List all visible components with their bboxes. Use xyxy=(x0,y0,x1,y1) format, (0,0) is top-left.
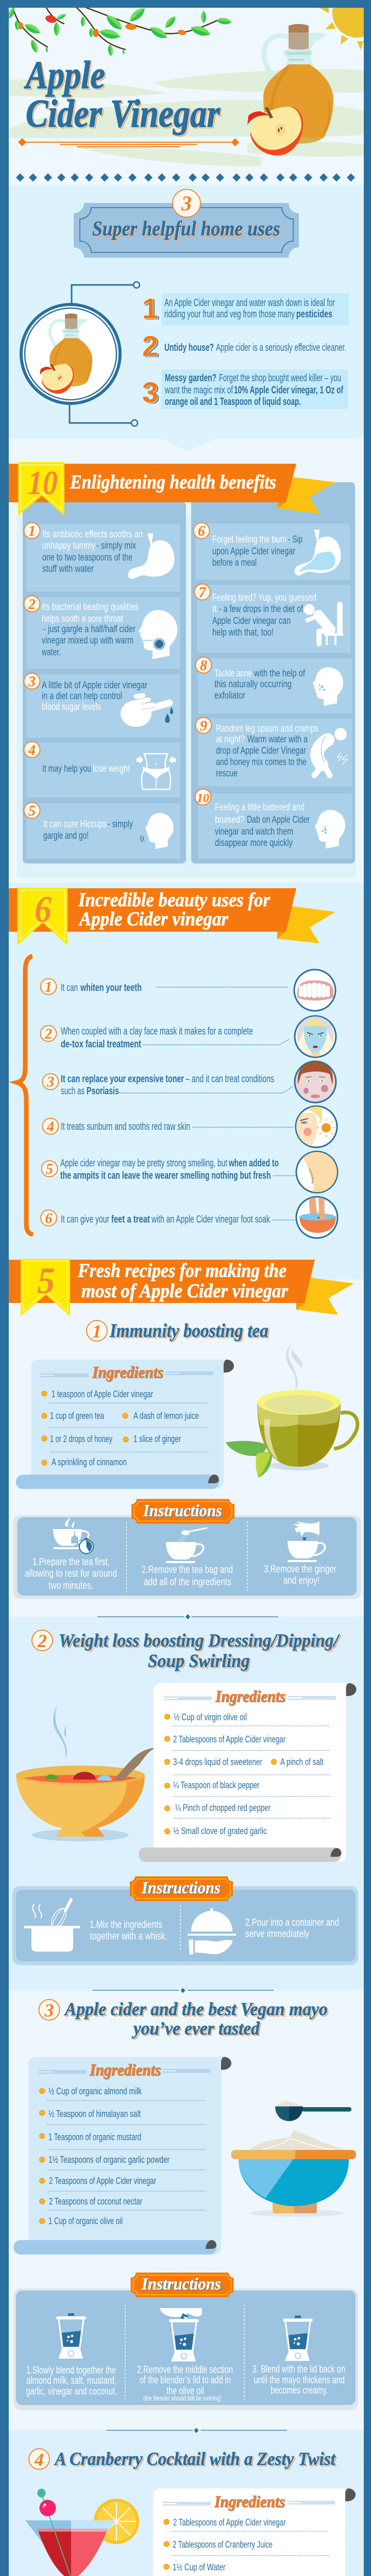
recipe 2 ingredients scroll: ½ Small clove of grated garlic xyxy=(173,1825,267,1836)
benefit 2: helps sooth a sore throat xyxy=(42,614,124,624)
icon: foot soak xyxy=(296,1197,338,1238)
recipe 1 instructions: 2.Remove the tea bag and xyxy=(142,1564,233,1575)
beauty use 6: It can give your xyxy=(61,1213,109,1225)
benefit 1 xyxy=(24,522,180,591)
benefit 9: and honey mix comes to the xyxy=(216,757,307,768)
recipe 3 ingredients scroll: 1 Teaspoon of organic mustard xyxy=(48,2131,141,2142)
benefit 8: 8 xyxy=(200,658,207,674)
benefit 2: 2 xyxy=(28,597,36,613)
icon: mayo bowl xyxy=(231,2130,356,2217)
benefit 4: 4 xyxy=(28,742,36,758)
instructions badge: Instructions xyxy=(143,1502,222,1520)
panel: home use 1: ridding your fruit and veg from those many xyxy=(164,309,295,320)
recipe 1 ingredients scroll: 1 or 2 drops of honey xyxy=(50,1433,113,1444)
icon: spoon xyxy=(275,2100,351,2121)
recipe 1 ingredients scroll: A sprinkling of cinnamon xyxy=(52,1456,127,1467)
benefit 2 xyxy=(24,596,180,669)
panel: health benefits left column xyxy=(23,502,186,863)
recipe 3 instructions: becomes creamy. xyxy=(271,2385,328,2396)
benefit 7 xyxy=(194,584,350,653)
number badge 3: 3 xyxy=(181,192,192,215)
recipe 2 instructions: together with a whisk. xyxy=(90,1931,167,1942)
benefit 5 xyxy=(24,803,180,859)
benefit 6: 6 xyxy=(198,523,205,539)
instructions badge: Instructions xyxy=(141,1879,221,1897)
benefit 10: 10 xyxy=(197,792,209,805)
benefit 4 xyxy=(24,742,180,798)
recipe 3 ingredients scroll: ½ Cup of organic almond milk xyxy=(48,2086,142,2096)
benefit 7: - a few drops in the diet of xyxy=(219,604,303,615)
recipe 1 instructions: 1.Prepare the tea first, xyxy=(32,1556,110,1568)
icon: psoriasis face xyxy=(295,1061,336,1103)
brace xyxy=(17,956,33,1234)
ribbon: recipes xyxy=(9,1259,354,1316)
beauty use 3: – and it can treat conditions xyxy=(185,1073,274,1085)
recipe 2 heading xyxy=(32,1630,340,1671)
recipe 3 instructions: the olive oil xyxy=(166,2385,204,2397)
benefit 10: Feeling a little battered and xyxy=(215,802,305,813)
icon: teeth xyxy=(294,970,335,1011)
ribbon: recipes: Fresh recipes for making the xyxy=(77,1260,286,1282)
beauty use 4: 4 xyxy=(46,1119,54,1135)
benefit 3: 3 xyxy=(28,674,36,690)
benefit 4: It may help you xyxy=(42,764,91,774)
panel: home use 3 xyxy=(142,369,348,409)
benefit 3: A little bit of Apple cider vinegar xyxy=(42,680,148,691)
recipe 3 instructions: (the blender should still be running). xyxy=(143,2395,223,2402)
benefit 8 xyxy=(196,657,352,714)
ribbon: recipes: most of Apple Cider vinegar xyxy=(81,1280,289,1302)
heading text: Super helpful home uses xyxy=(92,217,280,240)
recipe 1 instructions: add all of the ingredients xyxy=(144,1577,231,1588)
title underline xyxy=(18,138,239,147)
recipe 3 instructions xyxy=(13,2273,358,2410)
panel: health benefits right column xyxy=(191,482,355,863)
benefit 7: 7 xyxy=(199,585,206,601)
recipe 2 ingredients scroll: ½ Cup of virgin olive oil xyxy=(174,1711,247,1722)
recipe 1 instructions: allowing to rest for around xyxy=(25,1568,117,1580)
benefit 2: - just gargle a half/half cider xyxy=(43,624,136,635)
recipe 4 ingredients scroll: 1½ Cup of Water xyxy=(173,2562,226,2572)
apple tree branches xyxy=(7,5,232,56)
beauty use 5: when added to xyxy=(228,1157,279,1169)
benefit 8: with the help of xyxy=(254,668,306,679)
recipe 3 heading: you’ve ever tasted xyxy=(131,2018,260,2039)
benefit 9: rescue xyxy=(216,768,238,779)
recipe 1 ingredients scroll: 1 teaspoon of Apple Cider vinegar xyxy=(52,1388,153,1399)
recipe 3 ingredients scroll: 1½ Teaspoons of organic garlic powder xyxy=(48,2154,170,2165)
benefit 6: before a meal xyxy=(212,557,257,568)
beauty use 5: the armpits it can leave the wearer smelling nothing but fresh xyxy=(60,1170,271,1181)
recipe 1 ingredients scroll: A dash of lemon juice xyxy=(133,1410,199,1421)
ribbon: health benefits xyxy=(9,462,335,516)
benefit 7: it xyxy=(212,604,217,615)
benefit 2: Its bacterial beating qualities xyxy=(42,602,139,613)
title: Apple xyxy=(24,54,105,97)
benefit 1: stuff with water xyxy=(42,564,94,574)
panel: home use 3: Messy garden? xyxy=(165,372,216,384)
benefit 5: gargle and go! xyxy=(43,831,89,841)
icon: blender 2 with hand xyxy=(160,2308,202,2362)
recipe 2 ingredients scroll: ¼ Pinch of chopped red pepper xyxy=(175,1802,271,1813)
recipe 3 heading: Apple cider and the best Vegan mayo xyxy=(64,1999,328,2020)
beauty use 3: such as xyxy=(61,1085,85,1097)
panel: home use 3: 3 xyxy=(142,376,158,409)
recipe 3 instructions: almond milk, salt, mustard, xyxy=(26,2375,116,2386)
ribbon: health benefits: 10 xyxy=(28,464,58,502)
ribbon: beauty uses: Incredible beauty uses for xyxy=(78,889,271,911)
benefit 5: It can cure Hiccups xyxy=(43,819,107,829)
panel: home use 1: pesticides xyxy=(296,309,332,320)
benefit 3: blood sugar levels xyxy=(42,702,101,713)
instructions badge xyxy=(131,2273,234,2297)
recipe 3 ingredients scroll: 1 Cup of organic olive oil xyxy=(48,2215,123,2226)
icon: soup bowl xyxy=(16,1704,158,1841)
beauty use 1: 1 xyxy=(45,979,52,995)
divider xyxy=(106,2428,287,2433)
beauty use 6: feet a treat xyxy=(111,1213,150,1225)
benefit 6 xyxy=(194,522,350,580)
recipe 2 heading: 2 xyxy=(37,1631,47,1651)
beauty use 5: 5 xyxy=(46,1161,53,1177)
benefit 9: at night? xyxy=(216,734,245,745)
recipe 3 ingredients scroll: Ingredients xyxy=(89,2060,161,2079)
panel: home uses heading xyxy=(74,190,299,258)
beauty use 5: Apple cider vinegar may be pretty strong smelling, but xyxy=(60,1157,227,1169)
ribbon: beauty uses: 6 xyxy=(35,889,52,930)
bottle and apple xyxy=(247,24,334,156)
ribbon: health benefits: Enlightening health benefits xyxy=(70,471,276,493)
instructions badge xyxy=(130,1876,233,1901)
icon: spoon and cup xyxy=(166,1528,207,1563)
panel: home use 2: 2 xyxy=(142,330,158,362)
panel: home use 2: Untidy house? xyxy=(164,342,214,353)
recipe 3 heading xyxy=(39,1999,328,2039)
icon: blender 1 xyxy=(56,2313,86,2359)
benefit 9 xyxy=(196,717,352,786)
panel: home use 1 xyxy=(142,292,349,326)
benefit 7: help with that, too! xyxy=(212,628,274,638)
beauty use 4 xyxy=(42,1118,294,1135)
icon: cup and stopwatch xyxy=(53,1517,93,1554)
recipe 4 ingredients scroll: Ingredients xyxy=(214,2492,285,2511)
ribbon: beauty uses: Apple Cider vinegar xyxy=(78,908,229,930)
benefit 9: Warm water with a xyxy=(247,734,308,745)
benefit 9: drop of Apple Cider Vinegar xyxy=(216,745,306,756)
recipe 1 heading: Immunity boosting tea xyxy=(109,1320,268,1342)
lemon slice xyxy=(94,2499,139,2544)
recipe 2 ingredients scroll: 2 Tablespoons of Apple Cider vinegar xyxy=(173,1734,285,1744)
benefit 8: this naturally occurring xyxy=(214,679,292,690)
recipe 3 ingredients scroll: 2 Teaspoons of Apple Cider vinegar xyxy=(49,2175,156,2186)
benefit 5: 5 xyxy=(28,803,36,819)
beauty use 6: with an Apple Cider vinegar foot soak xyxy=(151,1213,271,1225)
recipe 3 ingredients scroll xyxy=(14,2057,231,2255)
beauty use 2: When coupled with a clay face mask it makes for a complete xyxy=(61,1025,253,1037)
benefit 4: lose weight xyxy=(93,764,130,774)
recipe 3 instructions: 2.Remove the middle section xyxy=(137,2364,233,2376)
icon: cloche and hand xyxy=(188,1908,236,1955)
benefit 1: Its antibiotic effects sooths an xyxy=(42,529,143,540)
benefit 3: in a diet can help control xyxy=(42,691,122,702)
recipe 1 ingredients scroll: Ingredients xyxy=(92,1363,163,1381)
panel: home use 3: orange oil and 1 Teaspoon of liquid soap. xyxy=(165,396,301,408)
beauty use 3: It can replace your expensive toner xyxy=(61,1073,184,1085)
benefit 10: vinegar and watch them xyxy=(215,826,293,837)
recipe 2 ingredients scroll: A pinch of salt xyxy=(280,1756,324,1767)
recipe 2 ingredients scroll: ¼ Teaspoon of black pepper xyxy=(173,1780,260,1790)
recipe 2 ingredients scroll: Ingredients xyxy=(215,1687,285,1705)
benefit 8: exfoliator xyxy=(214,690,246,701)
recipe 3 instructions: 1.Slowly blend together the xyxy=(26,2365,116,2376)
beauty use 2: de-tox facial treatment xyxy=(61,1038,141,1050)
benefit 10: disappear more quickly xyxy=(215,838,293,849)
title: Cider Vinegar xyxy=(26,92,221,135)
beauty use 5 xyxy=(41,1157,295,1181)
recipe 4 ingredients scroll: 2 Tablespoons of Cranberry Juice xyxy=(173,2539,273,2550)
instructions badge xyxy=(131,1499,234,1524)
benefit 6: - Sip xyxy=(288,534,302,545)
divider xyxy=(97,1614,278,1619)
ribbon: beauty uses xyxy=(9,888,335,945)
beauty use 3: Psoriasis xyxy=(87,1085,119,1097)
recipe 3 ingredients scroll: ½ Teaspoon of himalayan salt xyxy=(48,2108,141,2119)
benefit 10: bruised? xyxy=(215,815,244,825)
icon: bottle medallion xyxy=(21,282,140,426)
benefit 7: Apple Cider vinegar can xyxy=(212,616,291,626)
recipe 2 heading: Soup Swirling xyxy=(148,1651,250,1671)
icon: hand and cup xyxy=(288,1521,325,1562)
beauty use 1: It can xyxy=(61,982,78,993)
benefit 9: Random leg spasm and cramps xyxy=(216,723,318,734)
benefit 1: one to two teaspoons of the xyxy=(42,552,132,563)
beauty use 6 xyxy=(41,1210,296,1227)
instructions badge: Instructions xyxy=(141,2275,221,2294)
benefit 2: water. xyxy=(41,647,61,658)
icon: tea cup xyxy=(226,1344,358,1478)
beauty use 3 xyxy=(42,1073,293,1097)
number badge 3 xyxy=(173,190,200,217)
recipe 1 instructions: 3.Remove the ginger xyxy=(264,1564,336,1575)
benefit 5: - simply xyxy=(108,819,133,829)
recipe 1 instructions xyxy=(13,1499,361,1599)
ribbon: recipes: 5 xyxy=(37,1260,55,1301)
recipe 2 instructions: serve immediately xyxy=(245,1928,309,1940)
icon: pot and whisk xyxy=(24,1900,80,1952)
divider xyxy=(93,1988,274,1993)
icon: cocktail xyxy=(21,2488,139,2576)
benefit 1: - simply mix xyxy=(96,540,136,551)
recipe 4 ingredients scroll: 2 Tablespoons of Apple Cider vinegar xyxy=(173,2517,285,2528)
recipe 2 instructions: 1.Mix the ingredients xyxy=(90,1919,162,1930)
benefit 8: Tackle acne xyxy=(214,668,252,679)
recipe 2 instructions xyxy=(12,1876,358,1965)
recipe 2 instructions: 2.Pour into a container and xyxy=(245,1917,339,1928)
header illustration xyxy=(7,0,371,166)
benefit 1: 1 xyxy=(28,523,36,539)
diamond divider row xyxy=(16,173,355,181)
benefit 10 xyxy=(195,789,352,859)
panel: home use 2 xyxy=(142,330,346,362)
benefit 3 xyxy=(24,673,180,738)
recipe 1 instructions: and enjoy! xyxy=(283,1575,319,1586)
recipe 3 instructions: of the blender’s lid to add in xyxy=(140,2375,231,2386)
recipe 2 ingredients scroll: 3-4 drops liquid of sweetener xyxy=(173,1756,262,1767)
recipe 4 ingredients scroll xyxy=(138,2488,356,2576)
icon: face mask xyxy=(295,1016,336,1059)
icon: blender 3 xyxy=(283,2315,313,2361)
benefit 6: Forget feeling the burn xyxy=(212,534,286,545)
recipe 2 heading: Weight loss boosting Dressing/Dipping/ xyxy=(59,1630,340,1651)
panel: home use 3: want the magic mix of xyxy=(164,384,233,396)
benefit 2: vinegar mixed up with warm xyxy=(42,635,133,646)
benefit 10: Dab on Apple Cider xyxy=(247,815,310,825)
recipe 1 instructions: two minutes. xyxy=(48,1580,93,1591)
benefit 9: 9 xyxy=(200,718,207,734)
benefit 1: unhappy tummy xyxy=(42,540,95,551)
recipe 4 heading: A Cranberry Cocktail with a Zesty Twist xyxy=(54,2448,336,2469)
beauty use 1: whiten your teeth xyxy=(80,982,142,993)
recipe 3 ingredients scroll: 2 Teaspoons of coconut nectar xyxy=(49,2196,142,2207)
recipe 4 heading: 4 xyxy=(34,2449,44,2470)
icon: sunburn xyxy=(296,1106,337,1148)
recipe 3 instructions: garlic, vinegar and coconut. xyxy=(26,2386,117,2397)
beauty use 6: 6 xyxy=(45,1211,53,1227)
recipe 1 ingredients scroll: 1 slice of ginger xyxy=(133,1433,181,1444)
beauty use 2 xyxy=(40,1025,289,1050)
benefit 7: Feeling tired? Yup, you guessed xyxy=(212,592,316,603)
beauty use 4: It treats sunburn and sooths red raw skin xyxy=(61,1121,190,1132)
beauty use 2: 2 xyxy=(44,1026,52,1042)
recipe 1 ingredients scroll xyxy=(16,1360,234,1489)
beauty use 3: 3 xyxy=(46,1074,54,1090)
recipe 2 ingredients scroll xyxy=(139,1683,357,1862)
icon: armpit xyxy=(296,1151,338,1195)
beauty use 1 xyxy=(40,979,288,995)
title xyxy=(24,54,221,135)
recipe 1 heading: 1 xyxy=(92,1321,102,1342)
sun xyxy=(319,8,364,50)
recipe 1 ingredients scroll: 1 cup of green tea xyxy=(50,1410,104,1421)
panel: home use 1: 1 xyxy=(142,292,158,325)
recipe 3 heading: 3 xyxy=(44,2000,54,2021)
benefit 6: upon Apple Cider vinegar xyxy=(212,546,296,557)
watercolor swatches xyxy=(9,69,364,166)
